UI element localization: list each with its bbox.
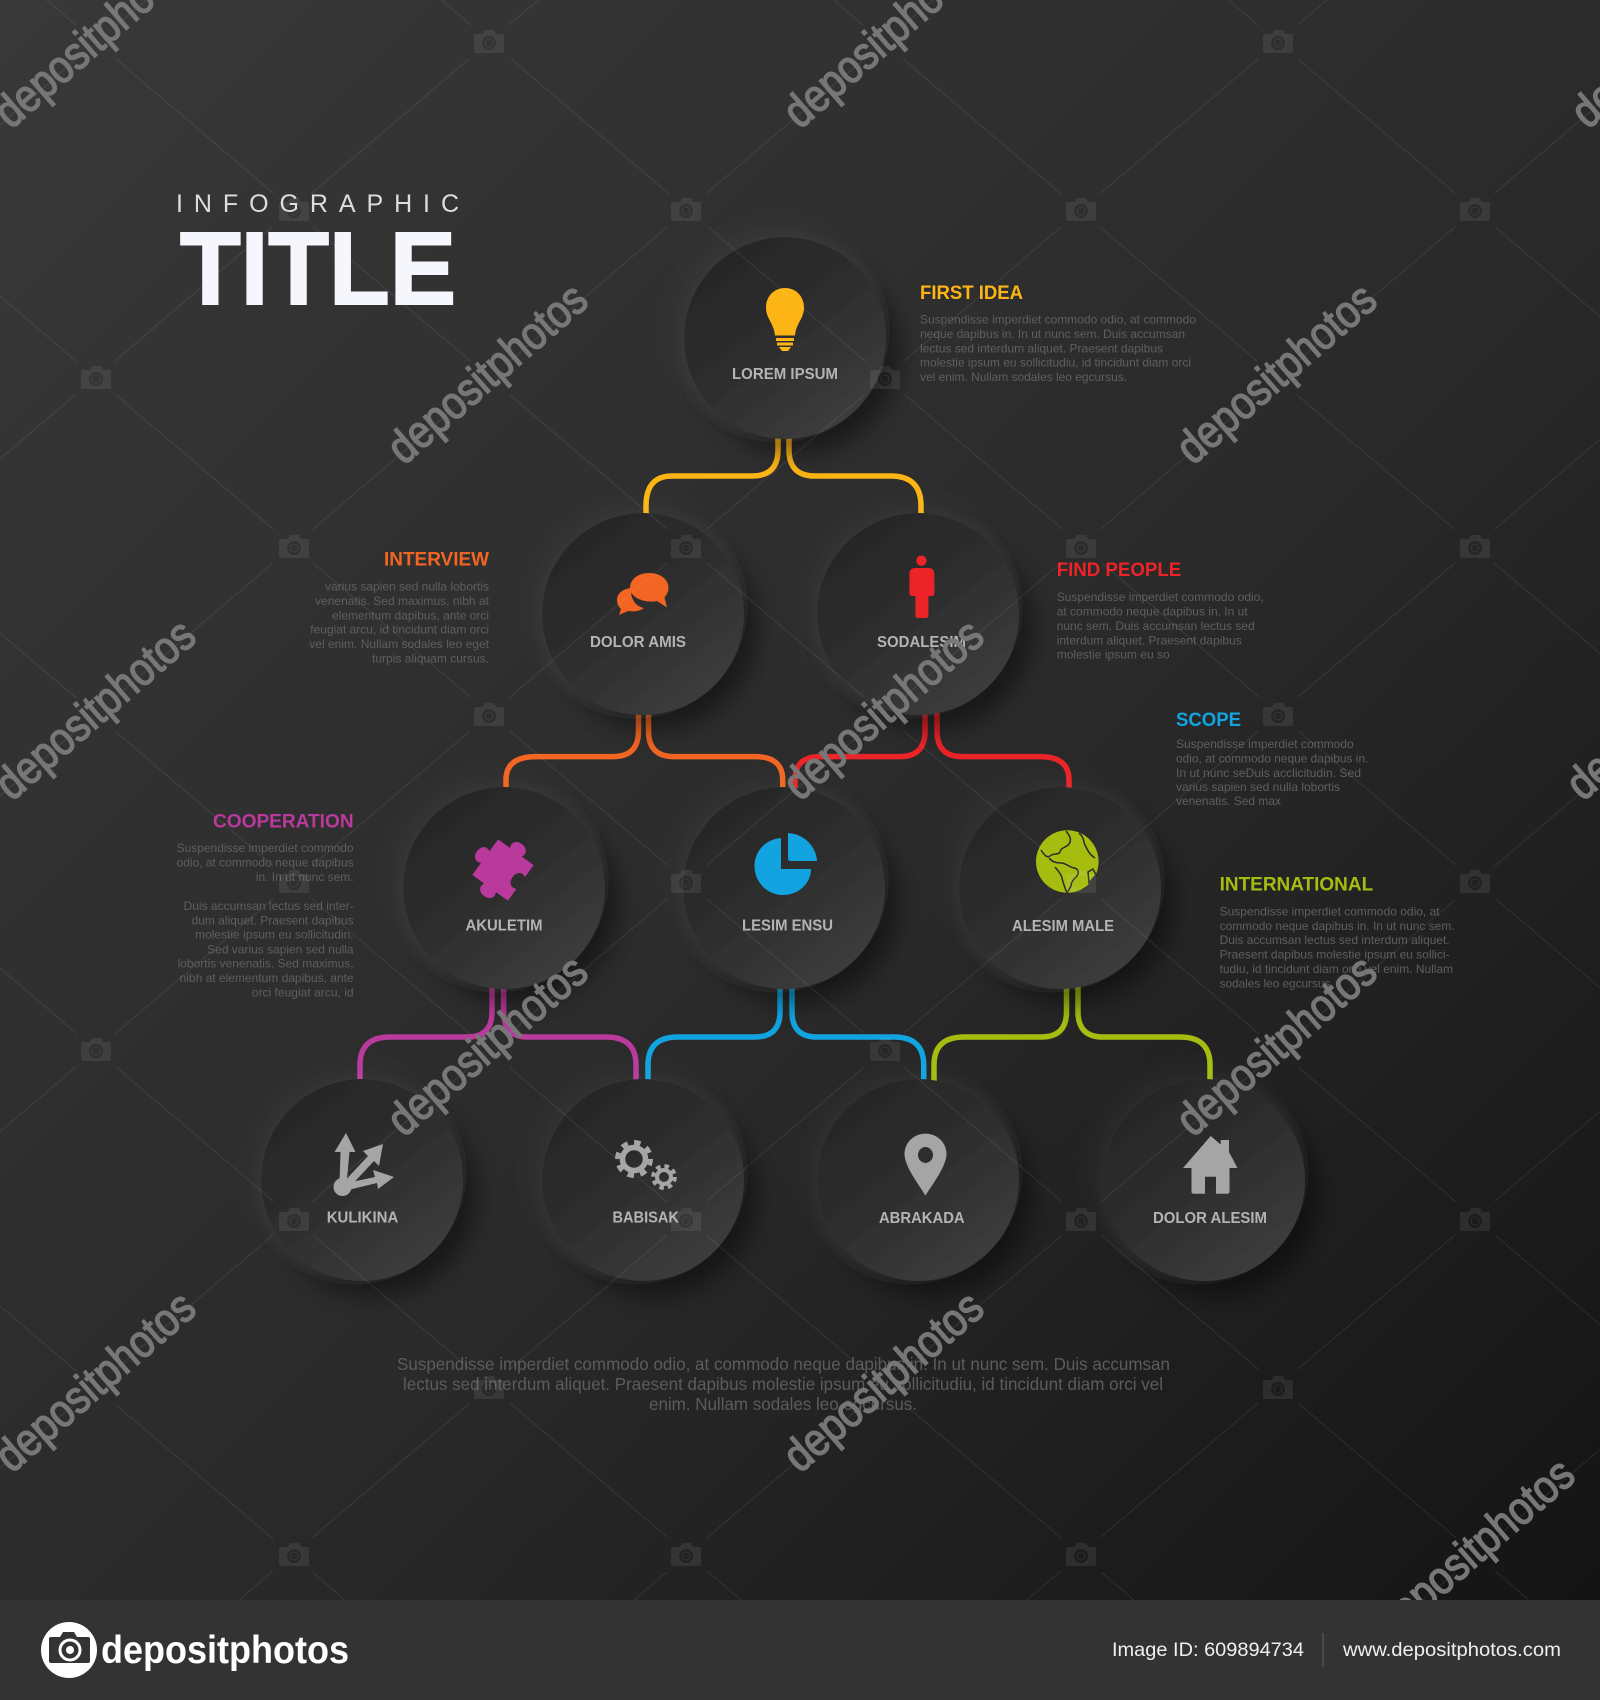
footer logo: depositphotos — [101, 1629, 349, 1672]
icon: person — [909, 556, 934, 618]
watermark text: depositphotos — [1165, 944, 1386, 1146]
text block: cooperation: orci feugiat arcu, id — [252, 985, 354, 999]
node: abrakada — [817, 1079, 1019, 1281]
website: www.depositphotos.com — [1342, 1639, 1561, 1661]
node: dolor amis: DOLOR AMIS — [590, 634, 686, 651]
text block: interview: varius sapien sed nulla lobortis — [325, 580, 489, 594]
text block: find people: nunc sem. Duis accumsan lectus sed — [1057, 619, 1255, 633]
icon: three arrows — [334, 1133, 394, 1196]
text block: cooperation — [177, 811, 354, 999]
text block: scope — [1176, 709, 1368, 808]
text block: first idea: vel enim. Nullam sodales leo egcursus. — [920, 370, 1127, 384]
text block: cooperation: COOPERATION — [213, 811, 354, 833]
node: sodalesim: SODALESIM — [877, 634, 966, 651]
node: alesim male — [959, 787, 1161, 989]
bottom paragraph: Suspendisse imperdiet commodo odio, at commodo neque dapibus in. In ut nunc sem. Duis accumsan — [397, 1354, 1170, 1374]
text block: cooperation: in. In ut nunc sem. — [256, 870, 354, 884]
icon: map pin — [904, 1134, 946, 1196]
text block: scope: varius sapien sed nulla lobortis — [1176, 780, 1340, 794]
text block: first idea: lectus sed interdum aliquet. Praesent dapibus — [920, 341, 1163, 355]
text block: cooperation: Suspendisse imperdiet commodo — [177, 841, 354, 855]
node: lesim ensu — [683, 787, 885, 989]
watermark text: depositphotos — [376, 272, 597, 474]
node: alesim male: ALESIM MALE — [1012, 918, 1114, 935]
text block: scope: Suspendisse imperdiet commodo — [1176, 737, 1354, 751]
text block: international — [1220, 874, 1455, 990]
node: babisak — [542, 1079, 744, 1281]
text block: find people: molestie ipsum eu so — [1057, 648, 1170, 662]
text block: first idea: FIRST IDEA — [920, 282, 1023, 304]
text block: international: Suspendisse imperdiet commodo odio, at — [1220, 904, 1440, 918]
watermark camera icons — [81, 30, 1490, 1566]
node: sodalesim — [817, 513, 1019, 715]
text block: first idea: neque dapibus in. In ut nunc sem. Duis accumsan — [920, 327, 1185, 341]
icon: pie chart — [754, 833, 817, 895]
watermark text: depositphotos — [772, 608, 993, 810]
text block: first idea: molestie ipsum eu sollicitudiu, id tincidunt diam orci — [920, 356, 1191, 370]
text block: find people — [1057, 559, 1264, 662]
text block: scope: SCOPE — [1176, 709, 1241, 731]
text block: find people: at commodo neque dapibus in. In ut — [1057, 604, 1248, 618]
watermark text: depositphotos — [772, 1280, 993, 1482]
text block: international: Duis accumsan lectus sed interdum aliquet. — [1220, 933, 1450, 947]
node: dolor alesim: DOLOR ALESIM — [1153, 1210, 1267, 1227]
icon: puzzle piece — [458, 825, 540, 909]
text block: interview: INTERVIEW — [384, 549, 490, 571]
watermark text: depositphotos — [376, 944, 597, 1146]
footer bar — [0, 1600, 1600, 1700]
text block: interview: turpis aliquam cursus. — [372, 652, 489, 666]
bottom paragraph: lectus sed interdum aliquet. Praesent dapibus molestie ipsum eu sollicitudiu, id tincidunt diam orci vel — [403, 1374, 1163, 1394]
text block: cooperation: Sed varius sapien sed nulla — [207, 942, 354, 956]
text block: cooperation: Duis accumsan lectus sed inter- — [184, 899, 354, 913]
node: lesim ensu: LESIM ENSU — [742, 918, 833, 935]
text block: first idea: Suspendisse imperdiet commodo odio, at commodo — [920, 312, 1196, 326]
text block: find people: interdum aliquet. Praesent dapibus — [1057, 633, 1242, 647]
title: INFOGRAPHIC — [176, 190, 459, 218]
node: abrakada: ABRAKADA — [879, 1210, 965, 1227]
connector lines — [360, 430, 1210, 1081]
icon: gears — [618, 1142, 675, 1188]
text block: cooperation: odio, at commodo neque dapibus — [177, 856, 354, 870]
text block: find people: Suspendisse imperdiet commodo odio, — [1057, 590, 1264, 604]
text block: find people: FIND PEOPLE — [1057, 559, 1181, 581]
node: lorem ipsum: LOREM IPSUM — [732, 366, 838, 383]
text block: cooperation: molestie ipsum eu sollicitudin. — [195, 928, 354, 942]
text block: first idea — [920, 282, 1196, 384]
icon: house — [1183, 1136, 1238, 1194]
footer logo — [41, 1622, 349, 1678]
image id: Image ID: 609894734 — [1112, 1639, 1304, 1661]
text block: scope: In ut nunc seDuis acclicitudin. Sed — [1176, 766, 1361, 780]
title: TITLE — [180, 211, 456, 326]
text block: interview — [309, 549, 490, 666]
bottom paragraph: enim. Nullam sodales leo egcursus. — [649, 1394, 917, 1414]
text block: scope: odio, at commodo neque dapibus in. — [1176, 751, 1368, 765]
text block: interview: feugiat arcu, id tincidunt diam orci — [310, 623, 489, 637]
node: babisak: BABISAK — [612, 1210, 679, 1227]
node: akuletim: AKULETIM — [466, 918, 542, 935]
text block: international: commodo neque dapibus in. In ut nunc sem. — [1220, 919, 1455, 933]
node: dolor alesim — [1103, 1079, 1305, 1281]
text block: international: Praesent dapibus molestie ipsum eu sollici- — [1220, 948, 1450, 962]
bottom paragraph — [397, 1354, 1170, 1414]
icon: speech bubbles — [617, 573, 668, 615]
icon: globe — [1036, 830, 1099, 893]
text block: cooperation: lobortis venenatis. Sed maximus, — [178, 957, 354, 971]
node: kulikina: KULIKINA — [327, 1210, 399, 1227]
text block: international: sodales leo egcursus. — [1220, 976, 1334, 990]
text block: international: INTERNATIONAL — [1220, 874, 1373, 896]
text block: interview: vel enim. Nullam sodales leo eget — [309, 637, 490, 651]
text block: international: tudiu, id tincidunt diam orci vel enim. Nullam — [1220, 962, 1453, 976]
text block: cooperation: nibh at elementum dapibus, ante — [180, 971, 354, 985]
text block: scope: venenatis. Sed max — [1176, 794, 1281, 808]
text block: interview: venenatis. Sed maximus, nibh at — [315, 594, 490, 608]
text block: cooperation: dum aliquet. Praesent dapibus — [192, 913, 354, 927]
watermark text: depositphotos — [1165, 272, 1386, 474]
node: lorem ipsum — [684, 237, 886, 439]
node: dolor amis — [542, 513, 744, 715]
icon: light bulb — [766, 288, 804, 351]
node: kulikina — [261, 1079, 463, 1281]
node: akuletim — [403, 787, 605, 989]
text block: interview: elementum dapibus, ante orci — [332, 608, 489, 622]
